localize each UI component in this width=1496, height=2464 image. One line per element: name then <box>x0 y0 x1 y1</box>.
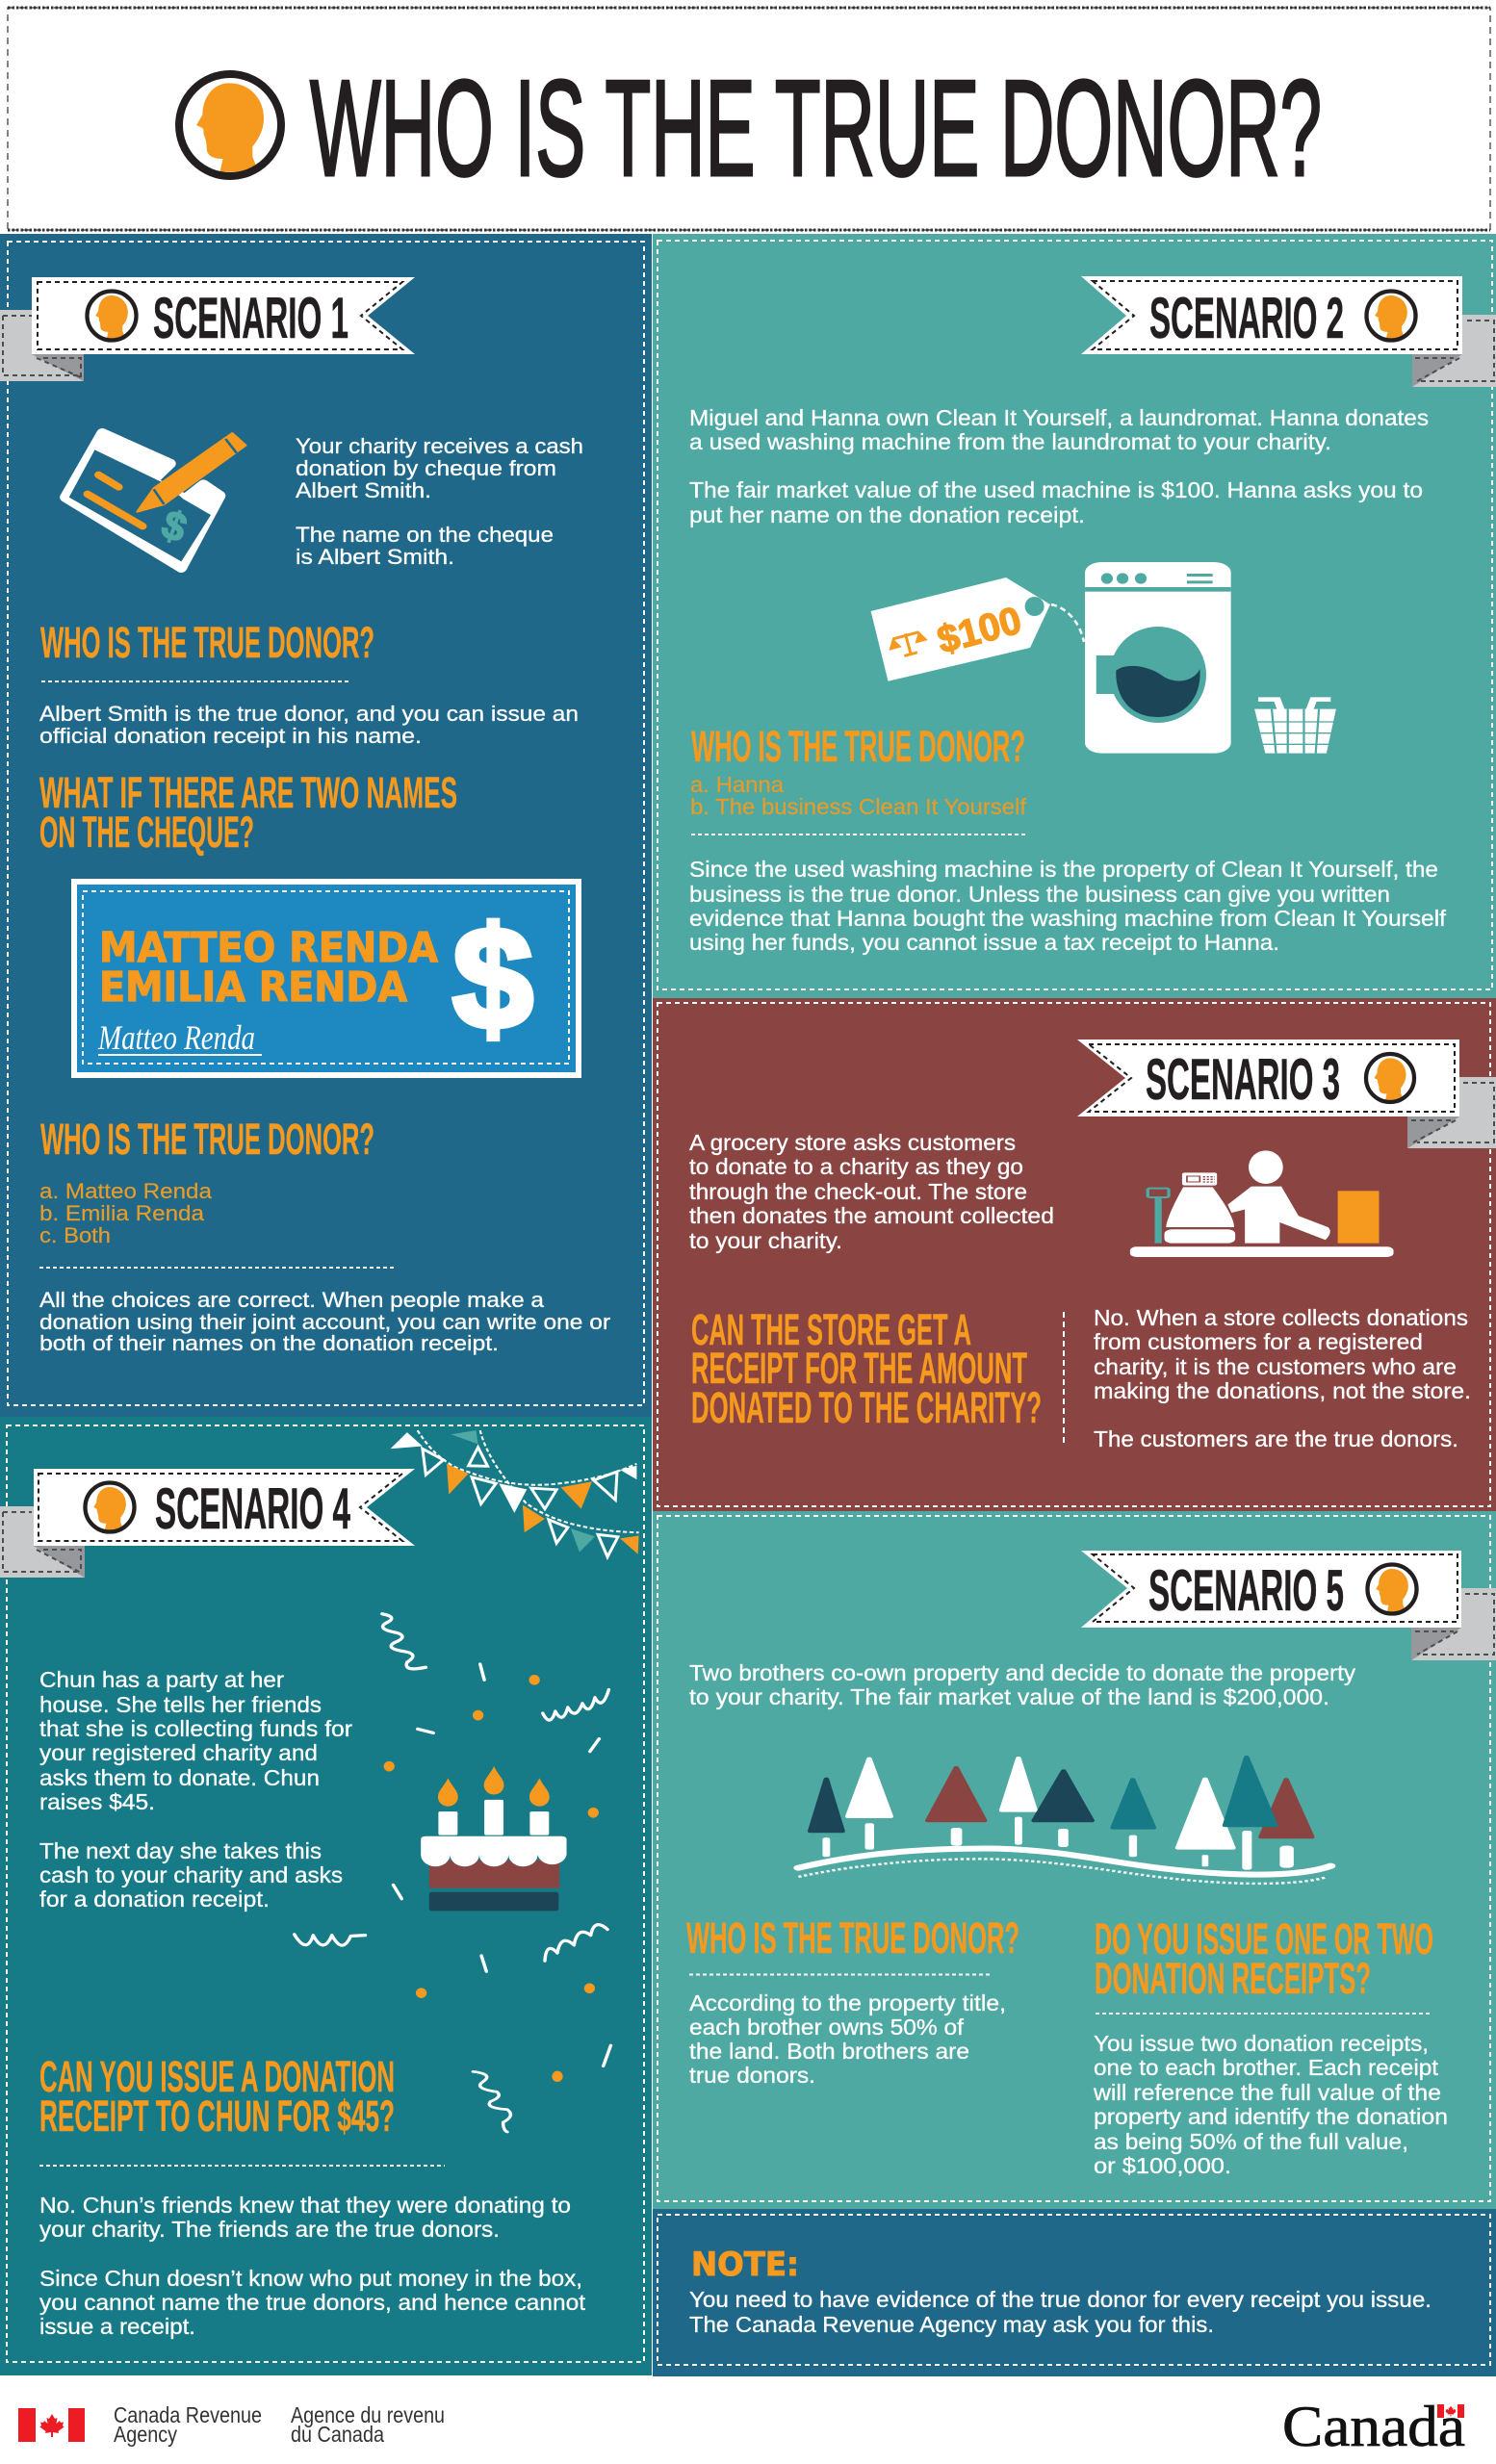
text: scenario 3 intro: through the check-out. The store <box>689 1179 1027 1204</box>
text: scenario 3 answer: The customers are the true donors. <box>1094 1426 1458 1451</box>
text: agency name french <box>291 2402 445 2447</box>
text: agency name english <box>114 2402 262 2447</box>
text: scenario 5 intro: to your charity. The fair market value of the land is $200,000. <box>689 1684 1329 1709</box>
fold: scenario 3 ribbon <box>1407 1077 1496 1148</box>
text: scenario 4 intro: Chun has a party at her <box>39 1667 284 1692</box>
text: joint account answer: donation using their joint account, you can write one or <box>39 1310 610 1334</box>
icon: canada flag <box>18 2408 85 2442</box>
text: scenario 2 intro: a used washing machine from the laundromat to your charity. <box>689 429 1331 454</box>
text: scenario 2 answer <box>689 857 1447 955</box>
icon: birthday cake <box>421 1766 567 1911</box>
ribbon: scenario 4 heading: SCENARIO 4 <box>155 1476 350 1541</box>
icon: confetti lower <box>473 2045 611 2132</box>
ribbon: scenario 4 heading <box>34 1469 415 1546</box>
text: choices: b. Emilia Renda <box>39 1201 205 1225</box>
fold: scenario 4 ribbon <box>0 1506 85 1578</box>
text: scenario 3 answer: making the donations, not the store. <box>1094 1378 1471 1403</box>
text: scenario 2 intro <box>689 405 1429 527</box>
text: scenario 4 answer: your charity. The friends are the true donors. <box>39 2217 500 2242</box>
ribbon: scenario 5 heading <box>1081 1551 1461 1628</box>
icon: confetti <box>295 1614 608 1998</box>
heading: two names <box>39 768 457 857</box>
text: scenario 2 answer: Since the used washing machine is the property of Clean It Yourself, the <box>689 857 1438 882</box>
text: scenario 3 intro <box>689 1130 1054 1253</box>
ribbon: scenario 1 heading: SCENARIO 1 <box>153 286 348 350</box>
text: scenario 1 intro: Albert Smith. <box>296 478 431 502</box>
text: choices <box>39 1179 213 1247</box>
text: answer <box>39 702 579 748</box>
heading: can the store get a receipt: DONATED TO THE CHARITY? <box>691 1383 1042 1432</box>
panel: scenario 1 <box>0 234 652 1417</box>
text: scenario 4 answer: No. Chun’s friends knew that they were donating to <box>39 2193 571 2218</box>
icon: cashier at check-out <box>1130 1150 1394 1257</box>
text: choices: a. Matteo Renda <box>39 1179 213 1203</box>
panel: scenario 3 <box>653 998 1496 1511</box>
text: scenario 4 answer <box>39 2193 586 2339</box>
cheque illustration: MATTEO RENDA <box>99 924 439 972</box>
fold: scenario 1 ribbon <box>0 310 84 381</box>
icon: party bunting <box>391 1430 639 1557</box>
heading: who is the true donor: WHO IS THE TRUE DONOR? <box>686 1913 1019 1963</box>
text: scenario 4 answer: issue a receipt. <box>39 2314 195 2339</box>
text: true donors answer: true donors. <box>689 2063 815 2088</box>
text: scenario 4 intro: for a donation receipt. <box>39 1886 270 1912</box>
icon: trees on land <box>798 1758 1330 1884</box>
fold: scenario 2 ribbon <box>1412 315 1496 387</box>
icon: washing machine <box>1085 562 1231 754</box>
heading: can the store get a receipt: CAN THE STORE GET A <box>691 1305 971 1354</box>
text: scenario 3 answer: from customers for a registered <box>1094 1329 1423 1354</box>
text: receipts answer: will reference the full value of the <box>1093 2080 1441 2105</box>
heading: who is the true donor second: WHO IS THE TRUE DONOR? <box>40 1115 374 1164</box>
text: scenario 3 answer <box>1094 1305 1471 1451</box>
text: true donors answer <box>689 1990 1006 2088</box>
text: scenario 4 intro: cash to your charity and asks <box>39 1862 343 1887</box>
heading: two names: WHAT IF THERE ARE TWO NAMES <box>39 768 457 817</box>
ribbon: scenario 3 heading: SCENARIO 3 <box>1146 1047 1340 1112</box>
panel: note <box>653 2209 1496 2376</box>
heading: can you issue a receipt: RECEIPT TO CHUN FOR $45? <box>39 2092 395 2141</box>
text: joint account answer: All the choices are correct. When people make a <box>39 1288 545 1312</box>
heading: can the store get a receipt: RECEIPT FOR THE AMOUNT <box>691 1344 1027 1393</box>
text: scenario 1 intro <box>296 434 583 569</box>
text: receipts answer: or $100,000. <box>1094 2153 1231 2178</box>
icon: cheque dollar sign: $ <box>156 500 193 552</box>
canada wordmark: Canada <box>1282 2395 1465 2458</box>
title banner <box>8 8 1490 230</box>
text: scenario 4 answer: you cannot name the true donors, and hence cannot <box>39 2290 586 2315</box>
text: scenario 4 intro: house. She tells her friends <box>39 1692 322 1717</box>
icon: price tag <box>871 578 1084 681</box>
icon: balance scale <box>887 629 929 659</box>
icon: donor head large <box>179 74 281 176</box>
cheque illustration: $ <box>452 897 533 1059</box>
text: joint account answer: both of their names on the donation receipt. <box>39 1331 499 1355</box>
text: answer: Albert Smith is the true donor, and you can issue an <box>39 702 579 726</box>
cheque illustration: EMILIA RENDA <box>99 963 408 1012</box>
text: scenario 4 intro <box>39 1667 352 1912</box>
ribbon: scenario 2 heading <box>1081 276 1462 354</box>
text: receipts answer: You issue two donation receipts, <box>1094 2031 1429 2056</box>
text: scenario 5 intro: Two brothers co-own property and decide to donate the property <box>689 1660 1356 1685</box>
heading: can you issue a receipt: CAN YOU ISSUE A DONATION <box>39 2052 395 2101</box>
text: scenario 3 answer: No. When a store collects donations <box>1094 1305 1468 1330</box>
text: receipts answer: property and identify the donation <box>1094 2104 1448 2129</box>
panel: scenario 4 <box>0 1417 652 2375</box>
text: note body: The Canada Revenue Agency may ask you for this. <box>689 2312 1214 2337</box>
text: answer: official donation receipt in his name. <box>39 724 422 748</box>
text: scenario 2 intro: Miguel and Hanna own Clean It Yourself, a laundromat. Hanna donates <box>689 405 1429 430</box>
text: scenario 2 choices: b. The business Clean It Yourself <box>690 794 1027 819</box>
text: scenario 4 intro: that she is collecting funds for <box>39 1716 352 1741</box>
ribbon: scenario 3 heading <box>1077 1040 1459 1116</box>
heading: who is the true donor: WHO IS THE TRUE DONOR? <box>40 618 374 667</box>
text: scenario 4 intro: your registered charity and <box>39 1740 318 1765</box>
heading: note: NOTE: <box>691 2246 799 2284</box>
icon: laundry basket <box>1254 700 1336 754</box>
text: scenario 1 intro: Your charity receives a cash <box>296 434 583 458</box>
heading: who is the true donor: WHO IS THE TRUE DONOR? <box>691 722 1025 771</box>
text: scenario 2 intro: The fair market value of the used machine is $100. Hanna asks you to <box>689 477 1423 502</box>
text: receipts answer <box>1093 2031 1448 2178</box>
text: agency name french: du Canada <box>291 2422 384 2447</box>
text: scenario 2 answer: evidence that Hanna bought the washing machine from Clean It Yourself <box>689 906 1447 931</box>
panel: scenario 5 <box>653 1511 1496 2209</box>
text: note body: You need to have evidence of the true donor for every receipt you issue. <box>689 2287 1432 2312</box>
heading: can you issue a receipt <box>39 2052 395 2141</box>
text: scenario 3 intro: then donates the amount collected <box>689 1203 1054 1228</box>
icon: price tag: $100 <box>933 599 1026 662</box>
text: receipts answer: as being 50% of the full value, <box>1094 2129 1408 2154</box>
text: scenario 4 intro: The next day she takes this <box>39 1838 322 1863</box>
ribbon: scenario 2 heading: SCENARIO 2 <box>1149 286 1344 350</box>
text: scenario 1 intro: is Albert Smith. <box>296 545 454 569</box>
heading: one or two receipts <box>1095 1914 1433 2003</box>
text: scenario 4 intro: raises $45. <box>39 1789 155 1814</box>
panel: scenario 2 <box>653 234 1496 998</box>
cheque illustration: Matteo Renda <box>97 1018 255 1057</box>
text: true donors answer: According to the property title, <box>689 1990 1006 2015</box>
heading: two names: ON THE CHEQUE? <box>39 808 254 857</box>
text: true donors answer: the land. Both brothers are <box>689 2039 969 2064</box>
text: scenario 2 answer: business is the true donor. Unless the business can give you written <box>689 882 1390 907</box>
text: note body <box>689 2287 1432 2337</box>
ribbon: scenario 1 heading <box>32 277 415 354</box>
text: scenario 5 intro <box>689 1660 1356 1709</box>
text: agency name english: Agency <box>114 2422 177 2447</box>
text: choices: c. Both <box>39 1223 111 1247</box>
text: scenario 1 intro: The name on the cheque <box>296 523 554 547</box>
text: scenario 2 answer: using her funds, you cannot issue a tax receipt to Hanna. <box>689 930 1279 955</box>
text: agency name french: Agence du revenu <box>291 2402 445 2427</box>
text: scenario 3 intro: A grocery store asks customers <box>689 1130 1016 1155</box>
text: agency name english: Canada Revenue <box>114 2402 262 2427</box>
text: scenario 1 intro: donation by cheque from <box>296 456 556 480</box>
text: scenario 3 intro: to your charity. <box>689 1228 842 1253</box>
text: true donors answer: each brother owns 50% of <box>689 2015 965 2040</box>
footer: government signature <box>18 2395 1465 2458</box>
text: scenario 2 choices: a. Hanna <box>690 772 784 797</box>
cheque illustration <box>71 879 581 1078</box>
text: scenario 3 intro: to donate to a charity as they go <box>689 1154 1023 1179</box>
icon: cheque and pencil <box>65 433 245 568</box>
ribbon: scenario 5 heading: SCENARIO 5 <box>1148 1558 1344 1623</box>
fold: scenario 5 ribbon <box>1411 1588 1496 1660</box>
text: scenario 2 choices <box>690 772 1027 819</box>
heading: can the store get a receipt <box>691 1305 1042 1432</box>
text: scenario 4 intro: asks them to donate. Chun <box>39 1765 320 1790</box>
text: joint account answer <box>39 1288 610 1355</box>
text: scenario 3 answer: charity, it is the customers who are <box>1094 1354 1457 1379</box>
text: scenario 4 answer: Since Chun doesn’t know who put money in the box, <box>39 2266 582 2291</box>
text: receipts answer: one to each brother. Each receipt <box>1094 2055 1439 2080</box>
text: scenario 2 intro: put her name on the donation receipt. <box>689 502 1085 527</box>
